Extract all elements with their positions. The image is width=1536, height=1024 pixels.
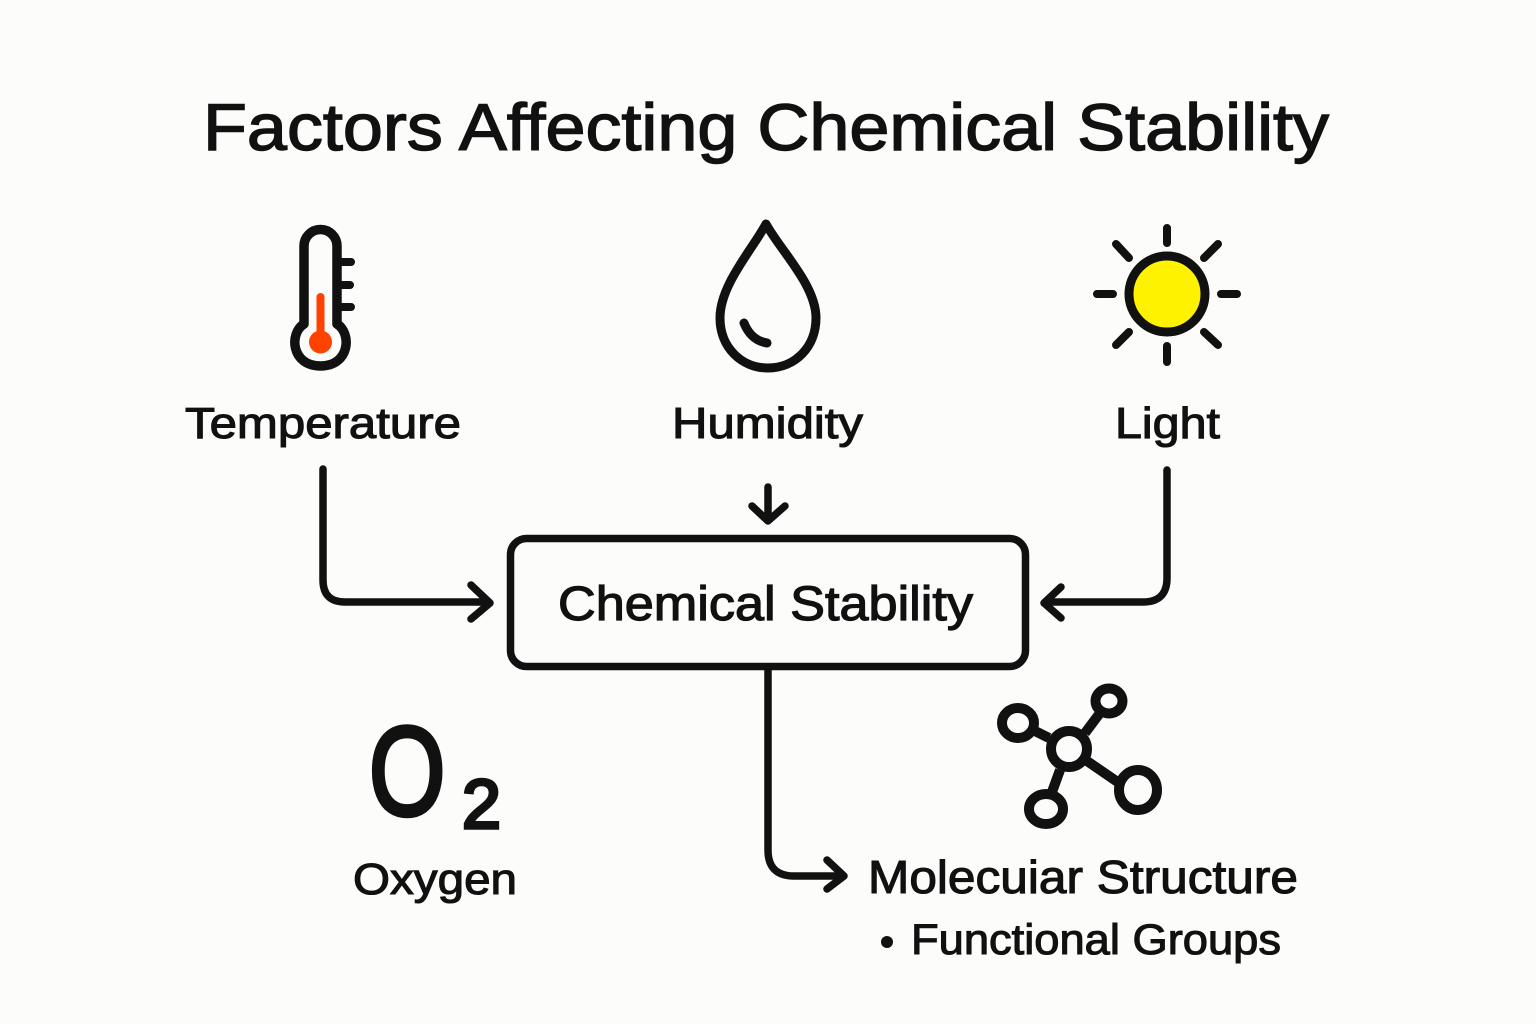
label: light: Light — [1115, 399, 1220, 448]
arrow: temperature to chemical stability — [323, 469, 490, 619]
arrow: light to chemical stability — [1044, 470, 1167, 618]
icon: oxygen symbol: O — [369, 701, 445, 842]
icon: sun — [1097, 228, 1237, 362]
label: functional groups: Functional Groups — [911, 916, 1281, 964]
label: molecular structure: Molecuiar Structure — [868, 851, 1298, 903]
icon: oxygen symbol — [369, 701, 501, 843]
icon: molecule — [1002, 688, 1157, 824]
arrow: humidity to chemical stability — [752, 487, 785, 521]
icon: oxygen symbol: 2 — [462, 765, 501, 843]
bullet — [881, 936, 893, 948]
arrow: chemical stability to molecular structure — [768, 670, 844, 889]
central box: chemical stability — [510, 538, 1026, 666]
label: chemical stability: Chemical Stability — [558, 578, 973, 631]
icon: water drop — [720, 224, 816, 368]
label: humidity: Humidity — [672, 399, 863, 448]
label: oxygen: Oxygen — [353, 855, 517, 904]
icon: thermometer — [295, 230, 351, 366]
label: temperature: Temperature — [185, 399, 461, 448]
title: Factors Affecting Chemical Stability — [203, 90, 1329, 164]
